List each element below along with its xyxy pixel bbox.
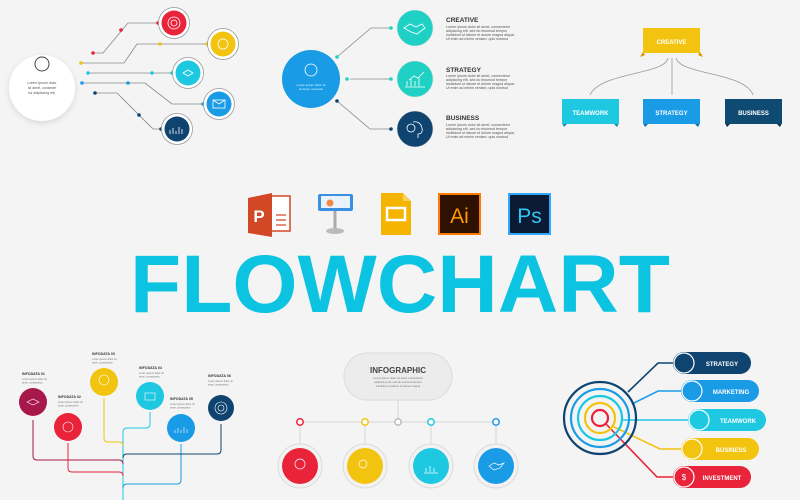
panel: bottom-left tree: Lorem ipsum dolor sit [92,357,117,361]
arrows [590,58,753,95]
text: business: Lorem ipsum dolor sit amet, consectetur [446,123,511,127]
box: teamwork: TEAMWORK [572,111,609,117]
pill: investment [673,466,751,488]
panel: bottom-left tree: amet, consectetur [22,380,43,384]
pill: business [681,438,759,460]
box: creative: CREATIVE [657,40,686,46]
panel: top-right org chart [562,28,782,127]
connector lines [81,23,207,129]
icon: photoshop: Ps [517,205,542,228]
text: creative: Ut enim ad minim veniam, quis nostrud [446,37,508,41]
text: business: Ut enim ad minim veniam, quis nostrud [446,135,508,139]
box: creative [640,28,703,57]
box: teamwork [562,99,619,127]
panel: bottom-left tree: amet, consectetur [139,374,160,378]
text: creative: incididunt ut labore et dolore magna aliqua. [446,33,515,37]
pill: teamwork: TEAMWORK [720,419,757,425]
connectors [300,400,496,446]
panel: bottom-middle infographic [278,353,518,488]
connector lines [606,363,694,477]
tree lines [33,398,221,500]
panel: top-middle three-branch diagram [282,10,515,147]
main blue circle: Lorem ipsum dolor sit [297,83,326,87]
pill: strategy [673,352,751,374]
node circles [19,388,47,416]
icon: google slides [381,193,411,235]
node circles [397,10,433,147]
pill: teamwork [688,409,766,431]
box: strategy: STRATEGY [655,111,688,117]
icon: powerpoint [248,193,290,237]
text: strategy: adipiscing elit, sed do eiusmod tempor [446,78,508,82]
pill: investment: $ [682,473,687,482]
labels: INFODATA 01 [22,372,45,376]
main blue circle: sit amet, consecte [299,87,323,91]
labels: INFODATA 06 [208,374,231,378]
box: strategy [643,99,700,127]
pill: business: BUSINESS [716,448,746,454]
panel: bottom-left tree: amet, consectetur [92,360,113,364]
labels: INFODATA 02 [58,395,81,399]
main blue circle [282,50,340,108]
labels: INFODATA 04 [139,366,162,370]
panel: bottom-left tree: amet, consectetur [208,382,229,386]
text: strategy [446,67,515,90]
icon: illustrator: Ai [450,205,469,228]
center bubble: sit amet, consecte [28,86,56,90]
text: business: adipiscing elit, sed do eiusmod tempor [446,127,508,131]
panel: bottom-right target diagram [564,352,766,488]
labels: INFODATA 05 [170,397,193,401]
panel: bottom-left tree: Lorem ipsum dolor sit [22,377,47,381]
labels: INFODATA 03 [92,352,115,356]
pill header: adipiscing elit, sed do eiusmod tempor [374,380,422,384]
pill: investment: INVESTMENT [703,476,742,482]
text: business [446,115,515,139]
text: creative: adipiscing elit, sed do eiusmod tempor [446,29,508,33]
pill header [344,353,452,400]
center bubble: tur adipiscing elit. [28,91,56,95]
icon: powerpoint: P [253,207,265,226]
panel: bottom-left tree: Lorem ipsum dolor sit [58,400,83,404]
panel: bottom-left tree: Lorem ipsum dolor sit [170,402,195,406]
connector lines [337,28,391,129]
box: business: BUSINESS [738,111,769,117]
text: business: incididunt ut labore et dolore magna aliqua. [446,131,515,135]
pill header: Lorem ipsum dolor sit amet, consectetur [373,376,423,380]
panel: bottom-left tree: Lorem ipsum dolor sit [208,379,233,383]
text: creative: Lorem ipsum dolor sit amet, consectetur [446,25,511,29]
panel: bottom-left tree: Lorem ipsum dolor sit [139,371,164,375]
pill: strategy: STRATEGY [706,362,738,368]
text: strategy: Ut enim ad minim veniam, quis nostrud [446,86,508,90]
pill header: INFOGRAPHIC [370,366,426,375]
text: strategy: Lorem ipsum dolor sit amet, consectetur [446,74,511,78]
panel: top-left radial flowchart [9,8,238,144]
panel: bottom-left tree [19,352,234,500]
text: creative [446,17,515,41]
node circles [278,444,518,488]
icon circles [158,8,238,144]
box: business [725,99,782,127]
pill: marketing: MARKETING [713,390,749,396]
panel: bottom-left tree: amet, consectetur [170,406,191,410]
target rings [564,382,636,454]
center bubble: Lorem ipsum dolor [28,81,57,85]
title: FLOWCHART [130,239,670,330]
text: strategy: STRATEGY [446,67,482,74]
text: strategy: incididunt ut labore et dolore magna aliqua. [446,82,515,86]
panel: bottom-left tree: amet, consectetur [58,404,79,408]
center bubble [9,55,75,121]
icon: illustrator [439,194,480,234]
text: business: BUSINESS [446,115,480,122]
pill: marketing [681,380,759,402]
icon: photoshop [509,194,550,234]
labels [22,352,231,401]
pill header: incididunt ut labore et dolore magna [376,384,421,388]
text: creative: CREATIVE [446,17,479,24]
icon: keynote [318,194,353,234]
